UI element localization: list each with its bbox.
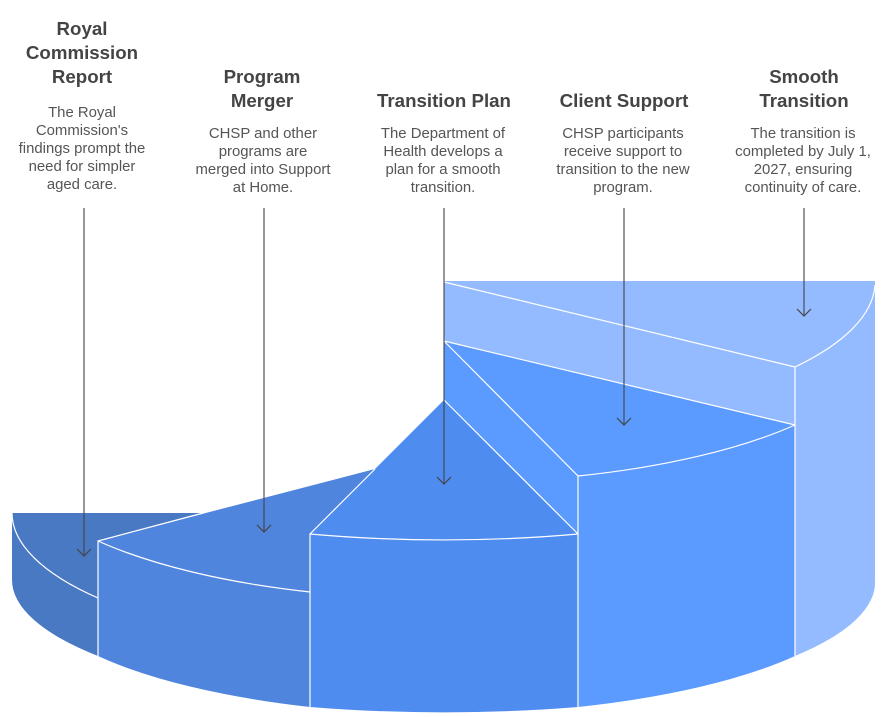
segment 2: Program Merger [98,469,375,707]
description: programs are [219,144,307,160]
description: aged care. [47,177,117,193]
description: findings prompt the [19,141,145,157]
description: need for simpler [29,159,135,175]
text block: Program Merger [196,66,331,196]
description: Commission's [36,123,128,139]
text block: Royal Commission Report [19,18,145,193]
heading: Program [224,66,300,87]
arrow: Royal Commission Report [77,208,91,556]
heading: Commission [26,42,138,63]
heading: Royal [57,18,107,39]
heading: Report [52,66,112,87]
arrow: Smooth Transition [797,208,811,316]
heading: Client Support [560,90,688,111]
description: CHSP and other [209,126,317,142]
description: plan for a smooth [385,162,501,178]
description: receive support to [564,144,682,160]
description: at Home. [233,180,293,196]
text block: Smooth Transition [735,66,871,196]
description: program. [593,180,653,196]
description: The Department of [381,126,506,142]
description: continuity of care. [745,180,861,196]
text block: Transition Plan [377,90,511,196]
heading: Smooth [769,66,839,87]
arrow: Program Merger [257,208,271,532]
description: merged into Support [196,162,331,178]
heading: Merger [231,90,293,111]
description: completed by July 1, [735,144,871,160]
text block: Client Support [556,90,690,196]
arrow: Transition Plan [437,208,451,484]
description: The Royal [48,105,116,121]
heading: Transition [759,90,849,111]
description: transition to the new [556,162,690,178]
segment 1: Royal Commission Report [12,513,203,656]
description: Health develops a [383,144,503,160]
segment 3: Transition Plan [310,400,578,712]
description: 2027, ensuring [754,162,852,178]
segment 4: Client Support [444,341,795,707]
heading: Transition Plan [377,90,511,111]
segment 5: Smooth Transition [444,281,875,656]
description: CHSP participants [562,126,684,142]
arrow: Client Support [617,208,631,425]
description: transition. [411,180,475,196]
description: The transition is [750,126,856,142]
